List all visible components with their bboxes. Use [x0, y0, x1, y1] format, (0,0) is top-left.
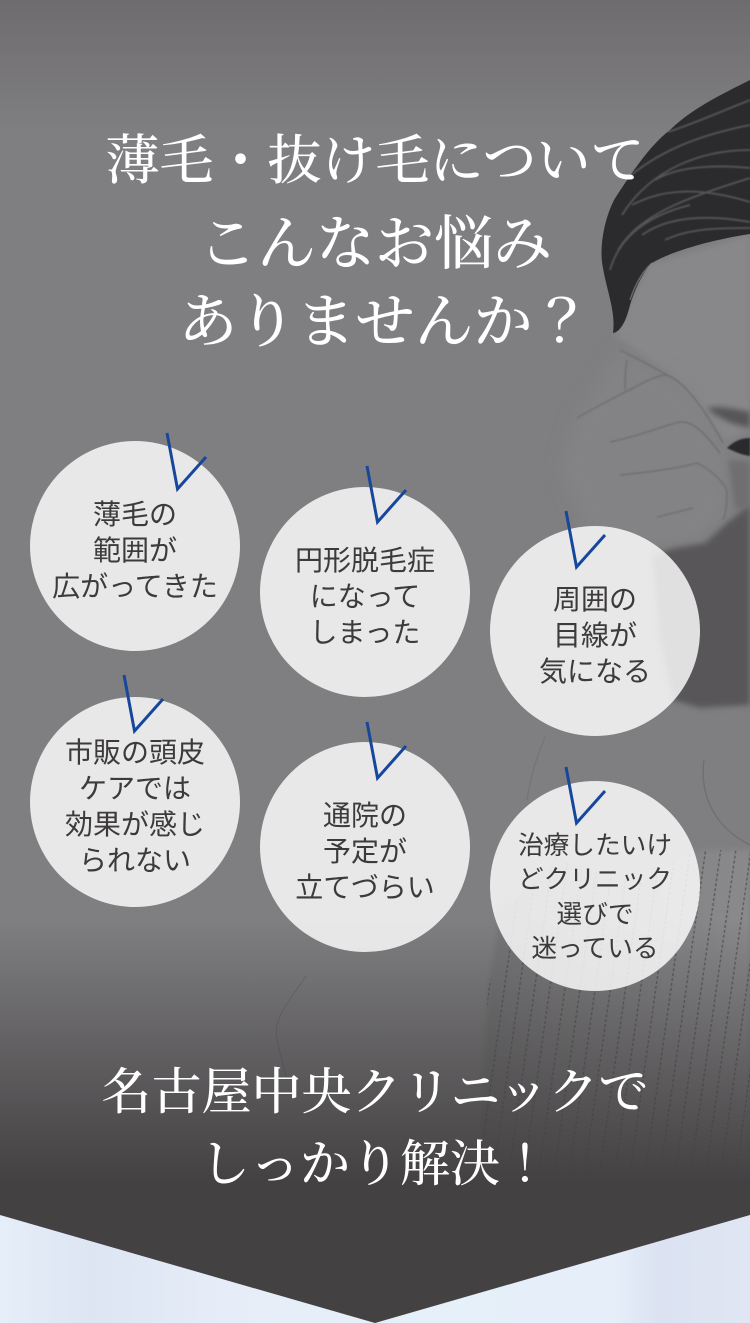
heading: ありませんか？ — [178, 289, 592, 355]
check mark 6 — [564, 766, 606, 826]
concern bubble 2: しまった — [310, 616, 420, 648]
closing message — [102, 1064, 648, 1192]
concern bubble 1: 広がってきた — [52, 570, 218, 602]
concern bubble 3: 気になる — [539, 656, 651, 686]
check mark 3 — [564, 510, 606, 570]
sweater — [480, 850, 750, 1240]
concern bubble 1: 薄毛の — [93, 498, 177, 530]
hair — [602, 80, 750, 333]
closing message: しっかり解決！ — [200, 1136, 550, 1192]
concern bubble 5: 通院の — [323, 800, 407, 830]
heading — [106, 131, 644, 355]
concern bubble 2: 円形脱毛症 — [295, 544, 435, 576]
concern bubble 4: 効果が感じ — [65, 808, 205, 840]
face and hand skin — [615, 235, 750, 440]
concern bubble 1: 範囲が — [93, 534, 177, 566]
check mark 2 — [366, 466, 407, 526]
bottom white shirt chevron background — [0, 1215, 750, 1323]
concern bubble 3: 周囲の — [553, 584, 637, 614]
concern bubble 3: 目線が — [553, 620, 637, 650]
concern bubble 4 — [30, 697, 240, 907]
check mark 4 — [122, 674, 164, 734]
concern bubble 2: になって — [310, 580, 420, 612]
concern bubble 1 — [30, 441, 240, 651]
concern bubble 2 — [260, 487, 470, 697]
concern bubble 4: 市販の頭皮 — [65, 736, 205, 768]
concern bubble 6: 選びで — [556, 900, 634, 928]
check mark 5 — [366, 722, 407, 782]
arm edges — [527, 737, 545, 800]
concern bubble 3 — [490, 526, 700, 736]
concern bubble 4: ケアでは — [79, 772, 191, 804]
concern bubble 5: 立てづらい — [295, 872, 435, 902]
check mark 1 — [166, 432, 207, 492]
heading: こんなお悩み — [198, 211, 552, 277]
concern bubble 5 — [260, 742, 470, 952]
concern bubble 6: 迷っている — [531, 935, 659, 963]
closing message: 名古屋中央クリニックで — [102, 1064, 648, 1120]
eyebrow and eye — [707, 407, 750, 428]
concern bubble 4: られない — [79, 844, 191, 876]
concern bubble 6: 治療したいけ — [518, 832, 672, 860]
hand shadow and neck — [652, 505, 750, 708]
heading: 薄毛・抜け毛について — [106, 131, 644, 191]
concern bubble 5: 予定が — [323, 836, 407, 866]
concern bubble 6 — [490, 781, 700, 991]
finger creases — [577, 350, 727, 520]
concern bubble 6: どクリニック — [518, 866, 672, 894]
